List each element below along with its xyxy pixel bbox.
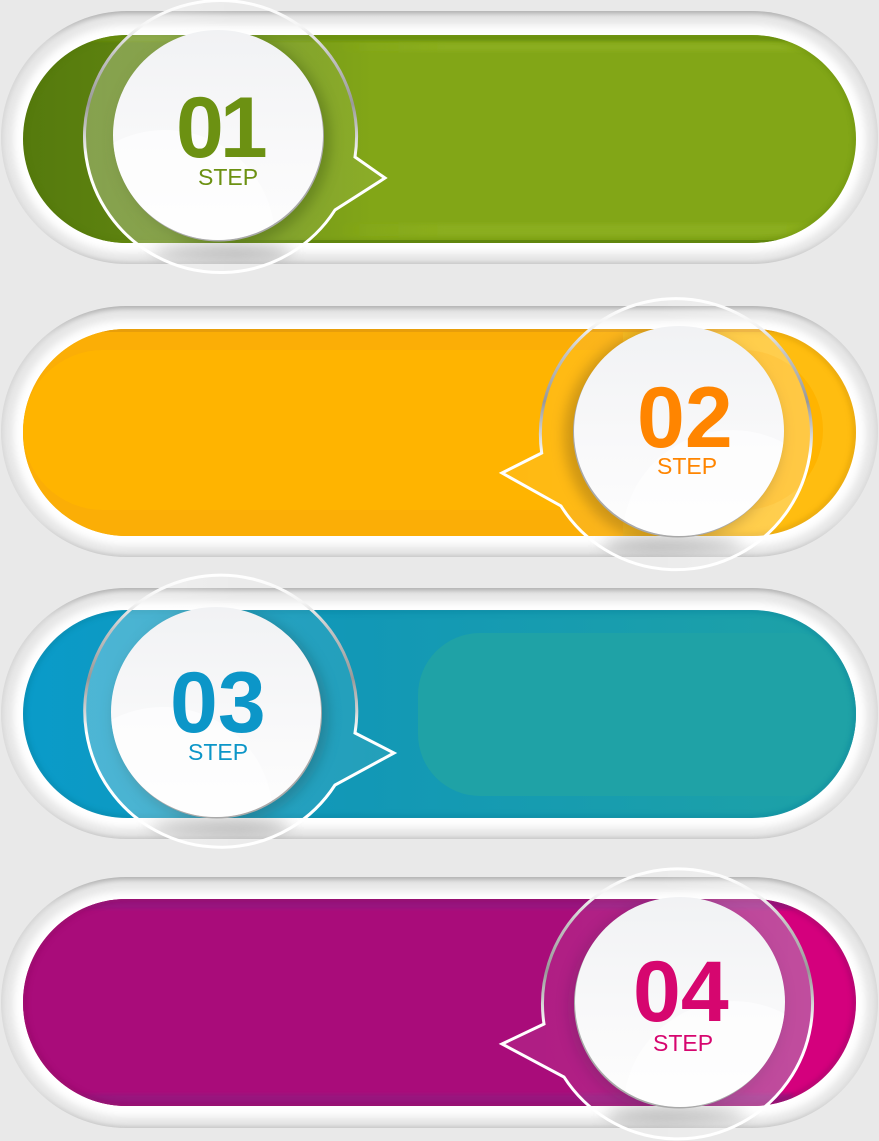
panel: step 02 — [1, 299, 878, 570]
label STEP 01: STEP — [198, 164, 258, 190]
white disc 01 — [113, 30, 324, 242]
amber pill bar 02 — [23, 327, 856, 545]
white disc 04 — [574, 897, 785, 1108]
speech ring 04 — [502, 869, 812, 1139]
number 04: 04 — [633, 944, 729, 1040]
panel: step 03 — [1, 575, 878, 847]
white disc 02 — [573, 326, 784, 538]
outer white pill frame 03 — [1, 588, 878, 839]
number 02: 02 — [637, 370, 733, 466]
outer white pill frame 04 — [1, 877, 878, 1128]
green pill bar 01 — [23, 32, 860, 248]
speech ring 01 — [85, 1, 385, 273]
outer white pill frame 02 — [1, 306, 878, 557]
teal pill bar 03 — [23, 609, 858, 825]
panel: step 01 — [1, 1, 878, 273]
number 01: 01 — [176, 80, 266, 176]
panel: step 04 — [1, 868, 878, 1139]
label STEP 02: STEP — [657, 453, 717, 479]
outer white pill frame 01 — [1, 11, 878, 264]
label STEP 04: STEP — [653, 1030, 713, 1056]
label STEP 03: STEP — [188, 739, 248, 765]
speech ring 03 — [85, 575, 394, 847]
white disc 03 — [111, 607, 322, 818]
speech ring 02 — [502, 299, 811, 570]
number 03: 03 — [170, 655, 266, 751]
magenta pill bar 04 — [23, 899, 856, 1106]
